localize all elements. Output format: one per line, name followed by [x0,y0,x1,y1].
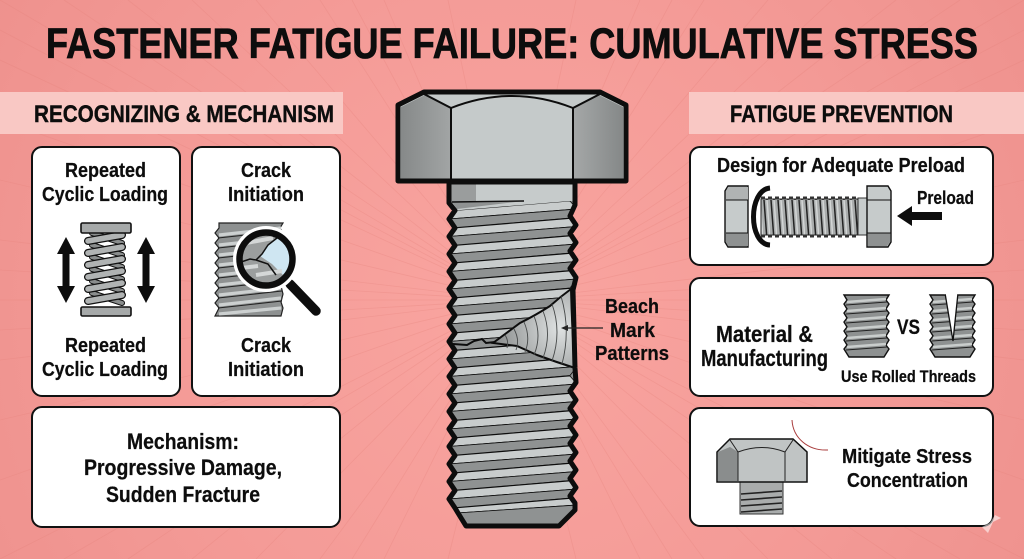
section header: recognizing and mechanism: RECOGNIZING & MECHANISM [34,101,334,128]
icon: rolled thread [844,295,889,357]
caption: use rolled threads: Use Rolled Threads [841,367,976,386]
section header: fatigue prevention: FATIGUE PREVENTION [730,101,953,128]
icon: right double arrow [137,237,155,303]
heading: crack initiation [228,160,304,206]
heading: crack initiation: Crack [241,160,292,182]
heading: crack initiation: Initiation [228,184,304,206]
text: mechanism description: Sudden Fracture [106,482,260,507]
heading: material and manufacturing: Manufacturing [701,345,828,371]
label: beach mark patterns [595,296,669,365]
caption: repeated cyclic loading: Repeated [65,335,146,357]
sparkle mark [982,515,1001,533]
heading: material and manufacturing: Material & [716,321,813,347]
panel: design for adequate preload [690,147,993,265]
caption: crack initiation: Initiation [228,359,304,381]
beach mark arrow [561,325,603,331]
heading: material and manufacturing [701,321,828,371]
label: preload: Preload [917,188,974,208]
arrow: preload force [897,206,942,226]
text: mitigate stress concentration: Concentration [847,470,968,492]
icon: bolt head with fillet [717,439,807,514]
text: mechanism description: Progressive Damage, [84,455,282,480]
panel: mitigate stress concentration [690,408,993,526]
icon: threaded section [215,223,283,316]
text: mechanism description: Mechanism: [127,429,239,454]
label: beach mark patterns: Patterns [595,343,669,365]
caption: repeated cyclic loading [42,335,168,381]
label: vs: VS [897,316,920,339]
crack line [453,339,495,345]
text: mechanism description [84,429,282,507]
section header: recognizing and mechanism [0,92,343,134]
stress curve [792,420,828,450]
icon: left double arrow [57,237,75,303]
section header: fatigue prevention [689,92,1024,134]
caption: repeated cyclic loading: Cyclic Loading [42,359,168,381]
bolt smooth shank [449,183,575,210]
label: beach mark patterns: Beach [605,296,659,318]
panel: repeated cyclic loading [32,147,180,396]
bolt hex head [398,92,626,181]
heading: repeated cyclic loading: Cyclic Loading [42,184,168,206]
icon: compressed spring [81,223,131,316]
central bolt illustration [398,92,626,527]
panel: material and manufacturing [690,278,993,396]
panel: mechanism [32,407,340,527]
text: mitigate stress concentration [842,446,972,492]
caption: crack initiation [228,335,304,381]
heading: repeated cyclic loading: Repeated [65,160,146,182]
caption: crack initiation: Crack [241,335,292,357]
label: beach mark patterns: Mark [610,320,656,342]
fatigue fracture with beach marks [453,289,575,368]
icon: magnifying glass over crack [233,226,316,311]
heading: repeated cyclic loading [42,160,168,206]
icon: bolted joint with washer [725,186,891,247]
panel: crack initiation [192,147,340,396]
heading: design for adequate preload: Design for Adequate Preload [717,155,965,177]
bolt threaded body [452,201,574,524]
bolt outline [449,182,576,526]
icon: cut thread with notch [930,291,975,357]
text: mitigate stress concentration: Mitigate Stress [842,446,972,468]
